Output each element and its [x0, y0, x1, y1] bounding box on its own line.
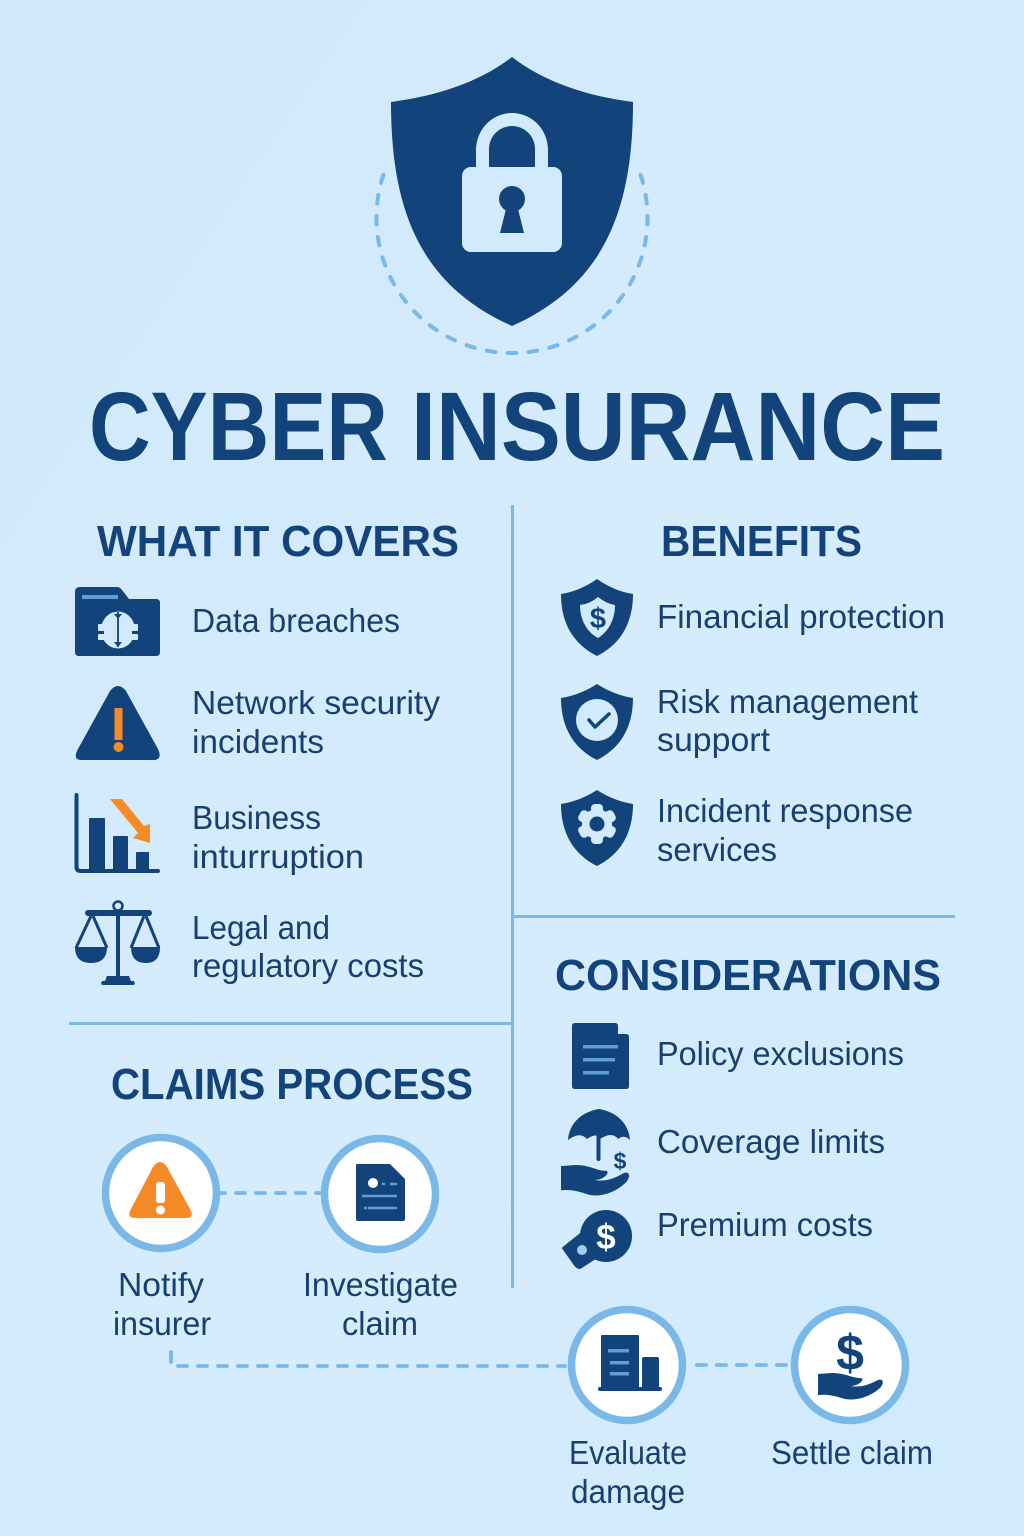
text: financial protection: Financial protection [657, 598, 945, 635]
heading: claims process: CLAIMS PROCESS [111, 1060, 473, 1109]
text: incident response services: Incident response [657, 792, 913, 829]
text: risk management support: support [657, 721, 770, 758]
section dividers [69, 505, 955, 1288]
icon: shield with dollar [561, 579, 633, 656]
panel: what it covers [75, 517, 459, 985]
text: coverage limits: Coverage limits [657, 1123, 885, 1160]
text: legal and regulatory costs: Legal and [192, 909, 330, 946]
step: settle claim: Settle claim [771, 1434, 933, 1471]
step: settle claim [771, 1310, 933, 1471]
title: CYBER [89, 372, 388, 481]
text: network security incidents: Network security [192, 684, 441, 721]
step: evaluate damage: damage [571, 1473, 685, 1510]
icon: scales of justice [75, 902, 160, 985]
icon: policy document [572, 1023, 629, 1089]
step: notify insurer [106, 1138, 216, 1342]
connector: notify to evaluate [171, 1352, 565, 1366]
step: evaluate damage [569, 1310, 687, 1510]
step: investigate claim: Investigate [303, 1266, 458, 1303]
step: investigate claim: claim [342, 1305, 418, 1342]
icon: shield with check [561, 684, 633, 760]
step: notify insurer: Notify [118, 1266, 205, 1303]
text: incident response services [657, 792, 913, 868]
text: premium costs: Premium costs [657, 1206, 873, 1243]
icon: dollar price tag [563, 1210, 632, 1268]
connector: evaluate to settle [697, 1363, 792, 1367]
text: policy exclusions: Policy exclusions [657, 1035, 904, 1072]
icon: shield with dollar: $ [590, 603, 606, 635]
heading: considerations: CONSIDERATIONS [555, 951, 941, 1000]
panel: benefits [561, 517, 945, 868]
text: risk management support [657, 683, 918, 758]
icon: falling bar chart [76, 795, 158, 871]
panel: considerations [555, 951, 941, 1268]
icon: dollar price tag: $ [596, 1218, 616, 1257]
text: network security incidents: incidents [192, 723, 324, 760]
text: incident response services: services [657, 831, 777, 868]
text: network security incidents [192, 684, 441, 760]
icon: shield with gear [561, 790, 633, 866]
step: investigate claim [303, 1138, 458, 1342]
panel: claims process [106, 1060, 933, 1510]
heading: what it covers: WHAT IT COVERS [97, 517, 459, 566]
title [89, 372, 945, 481]
icon: folder with chip [75, 587, 160, 656]
icon: umbrella over hand: $ [614, 1148, 627, 1174]
text: business interruption [192, 799, 364, 875]
text: business interruption: Business [192, 799, 321, 836]
connector: notify to investigate [216, 1191, 325, 1195]
step: evaluate damage: Evaluate [569, 1434, 687, 1471]
text: risk management support: Risk management [657, 683, 918, 720]
text: business interruption: inturruption [192, 838, 364, 875]
icon: warning triangle [76, 686, 160, 760]
icon: umbrella over hand [561, 1109, 630, 1195]
text: legal and regulatory costs: regulatory costs [192, 947, 424, 984]
step: settle claim: $ [836, 1325, 864, 1381]
text: data breaches: Data breaches [192, 602, 400, 639]
text: legal and regulatory costs [192, 909, 424, 984]
hero icon: shield with padlock [376, 57, 648, 353]
heading: benefits: BENEFITS [661, 517, 862, 566]
title: INSURANCE [411, 372, 945, 481]
step: notify insurer: insurer [113, 1305, 211, 1342]
